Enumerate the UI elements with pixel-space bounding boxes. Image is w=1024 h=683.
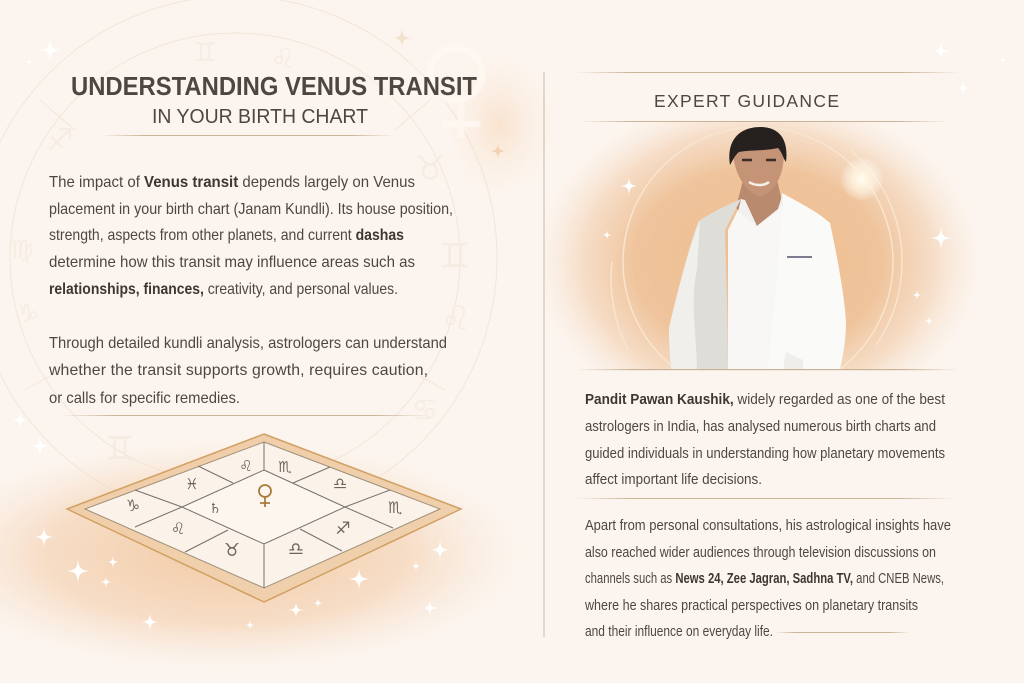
hair [729, 127, 786, 165]
zodiac wheel watermark: ♐︎ [47, 123, 73, 158]
text block: pandit pawan kaushik: astrologers in India, has analysed numerous birth charts and [585, 419, 936, 435]
zodiac wheel watermark: ♊︎ [439, 236, 471, 277]
title: IN YOUR BIRTH CHART [152, 106, 368, 128]
zodiac wheel watermark: ♌︎ [270, 42, 296, 75]
chart signs: ♌︎ [171, 519, 185, 538]
text block: pandit pawan kaushik: guided individuals in understanding how planetary movements [585, 446, 945, 462]
text block: kundli analysis: whether the transit supports growth, requires caution, [48, 362, 428, 379]
text block: media appearances: where he shares practical perspectives on planetary transits [584, 598, 918, 614]
text block: media appearances: also reached wider audiences through television discussions on [585, 545, 936, 561]
text block: kundli analysis [48, 335, 447, 407]
chart signs: ♎︎ [288, 539, 304, 560]
blazer right [768, 193, 846, 369]
center divider [544, 72, 545, 637]
shirt [728, 205, 783, 369]
zodiac wheel watermark: ♍︎ [10, 235, 34, 265]
icon: large venus symbol [430, 48, 482, 137]
portrait of man [669, 127, 846, 369]
zodiac wheel watermark: ♌︎ [441, 299, 471, 339]
text block: media appearances: channels such as News 24, Zee Jagran, Sadhna TV, and CNEB News, [585, 571, 944, 587]
kundli chart [67, 434, 461, 602]
portrait panel [550, 122, 966, 369]
text block: venus placement: placement in your birth chart (Janam Kundli). Its house position, [49, 201, 453, 218]
title [71, 73, 477, 128]
text block: venus placement: determine how this transit may influence areas such as [49, 254, 415, 271]
zodiac wheel watermark: ♉︎ [415, 149, 445, 189]
text block: kundli analysis: Through detailed kundli analysis, astrologers can understand [49, 335, 447, 352]
text block: media appearances: Apart from personal consultations, his astrological insights have [585, 518, 951, 534]
icon: venus in chart [259, 485, 271, 507]
right top rule [575, 72, 960, 73]
text block: media appearances [584, 518, 951, 640]
pocket square [787, 256, 812, 258]
sparkles: left column [12, 28, 506, 631]
zodiac wheel watermark [0, 0, 497, 520]
chart signs: ♉︎ [224, 540, 240, 561]
chart signs: ♎︎ [333, 474, 347, 493]
chart signs: ♏︎ [278, 458, 292, 476]
sparkles: right margin [932, 42, 1007, 96]
text block: pandit pawan kaushik: Pandit Pawan Kaushik, widely regarded as one of the best [585, 392, 945, 408]
text block: media appearances: and their influence on everyday life. [585, 624, 773, 640]
eyes and smile [742, 160, 776, 185]
neck [736, 180, 783, 226]
title: UNDERSTANDING VENUS TRANSIT [71, 73, 477, 101]
zodiac wheel watermark: ♊︎ [105, 429, 135, 469]
zodiac wheel watermark: ♑︎ [16, 299, 40, 329]
blazer left [669, 199, 741, 369]
chart signs: ♑︎ [126, 496, 140, 515]
zodiac wheel watermark: ♊︎ [192, 36, 218, 69]
heading: expert guidance: EXPERT GUIDANCE [654, 91, 841, 111]
chart signs: ♐︎ [335, 519, 351, 539]
lens flare [842, 160, 882, 200]
chart signs: ♏︎ [388, 498, 402, 517]
face [734, 148, 784, 197]
chart signs: ♌︎ [239, 457, 253, 475]
text block: kundli analysis: or calls for specific remedies. [49, 390, 240, 407]
chart signs [126, 457, 402, 561]
sparkles: portrait [602, 177, 952, 326]
chart signs: ♄︎ [209, 501, 221, 517]
chart signs: ♓︎ [185, 475, 199, 493]
halo glow [550, 122, 966, 369]
collar [738, 193, 783, 226]
text block: venus placement [49, 174, 453, 298]
text block: pandit pawan kaushik [585, 392, 945, 488]
zodiac wheel watermark: ♋︎ [412, 393, 438, 428]
halo rings [610, 131, 903, 369]
text block: venus placement: strength, aspects from other planets, and current dashas [49, 227, 404, 244]
text block: pandit pawan kaushik: affect important life decisions. [585, 472, 762, 488]
text block: venus placement: relationships, finances, creativity, and personal values. [49, 281, 398, 298]
text block: venus placement: The impact of Venus transit depends largely on Venus [49, 174, 415, 191]
